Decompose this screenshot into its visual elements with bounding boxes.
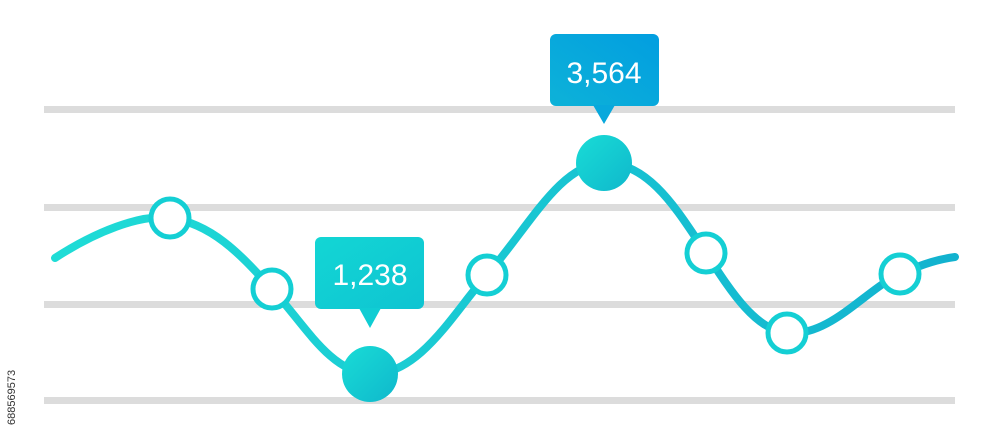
callout 3,564: 3,564 [566, 57, 642, 90]
callout 3,564 [550, 34, 659, 124]
callout 1,238 [315, 237, 424, 328]
side id text: 688569573 [6, 370, 18, 425]
callout 1,238: 1,238 [332, 259, 408, 292]
highlighted point low [342, 346, 398, 402]
data points [151, 199, 919, 352]
line curve [55, 163, 955, 374]
highlighted point high [576, 135, 632, 191]
